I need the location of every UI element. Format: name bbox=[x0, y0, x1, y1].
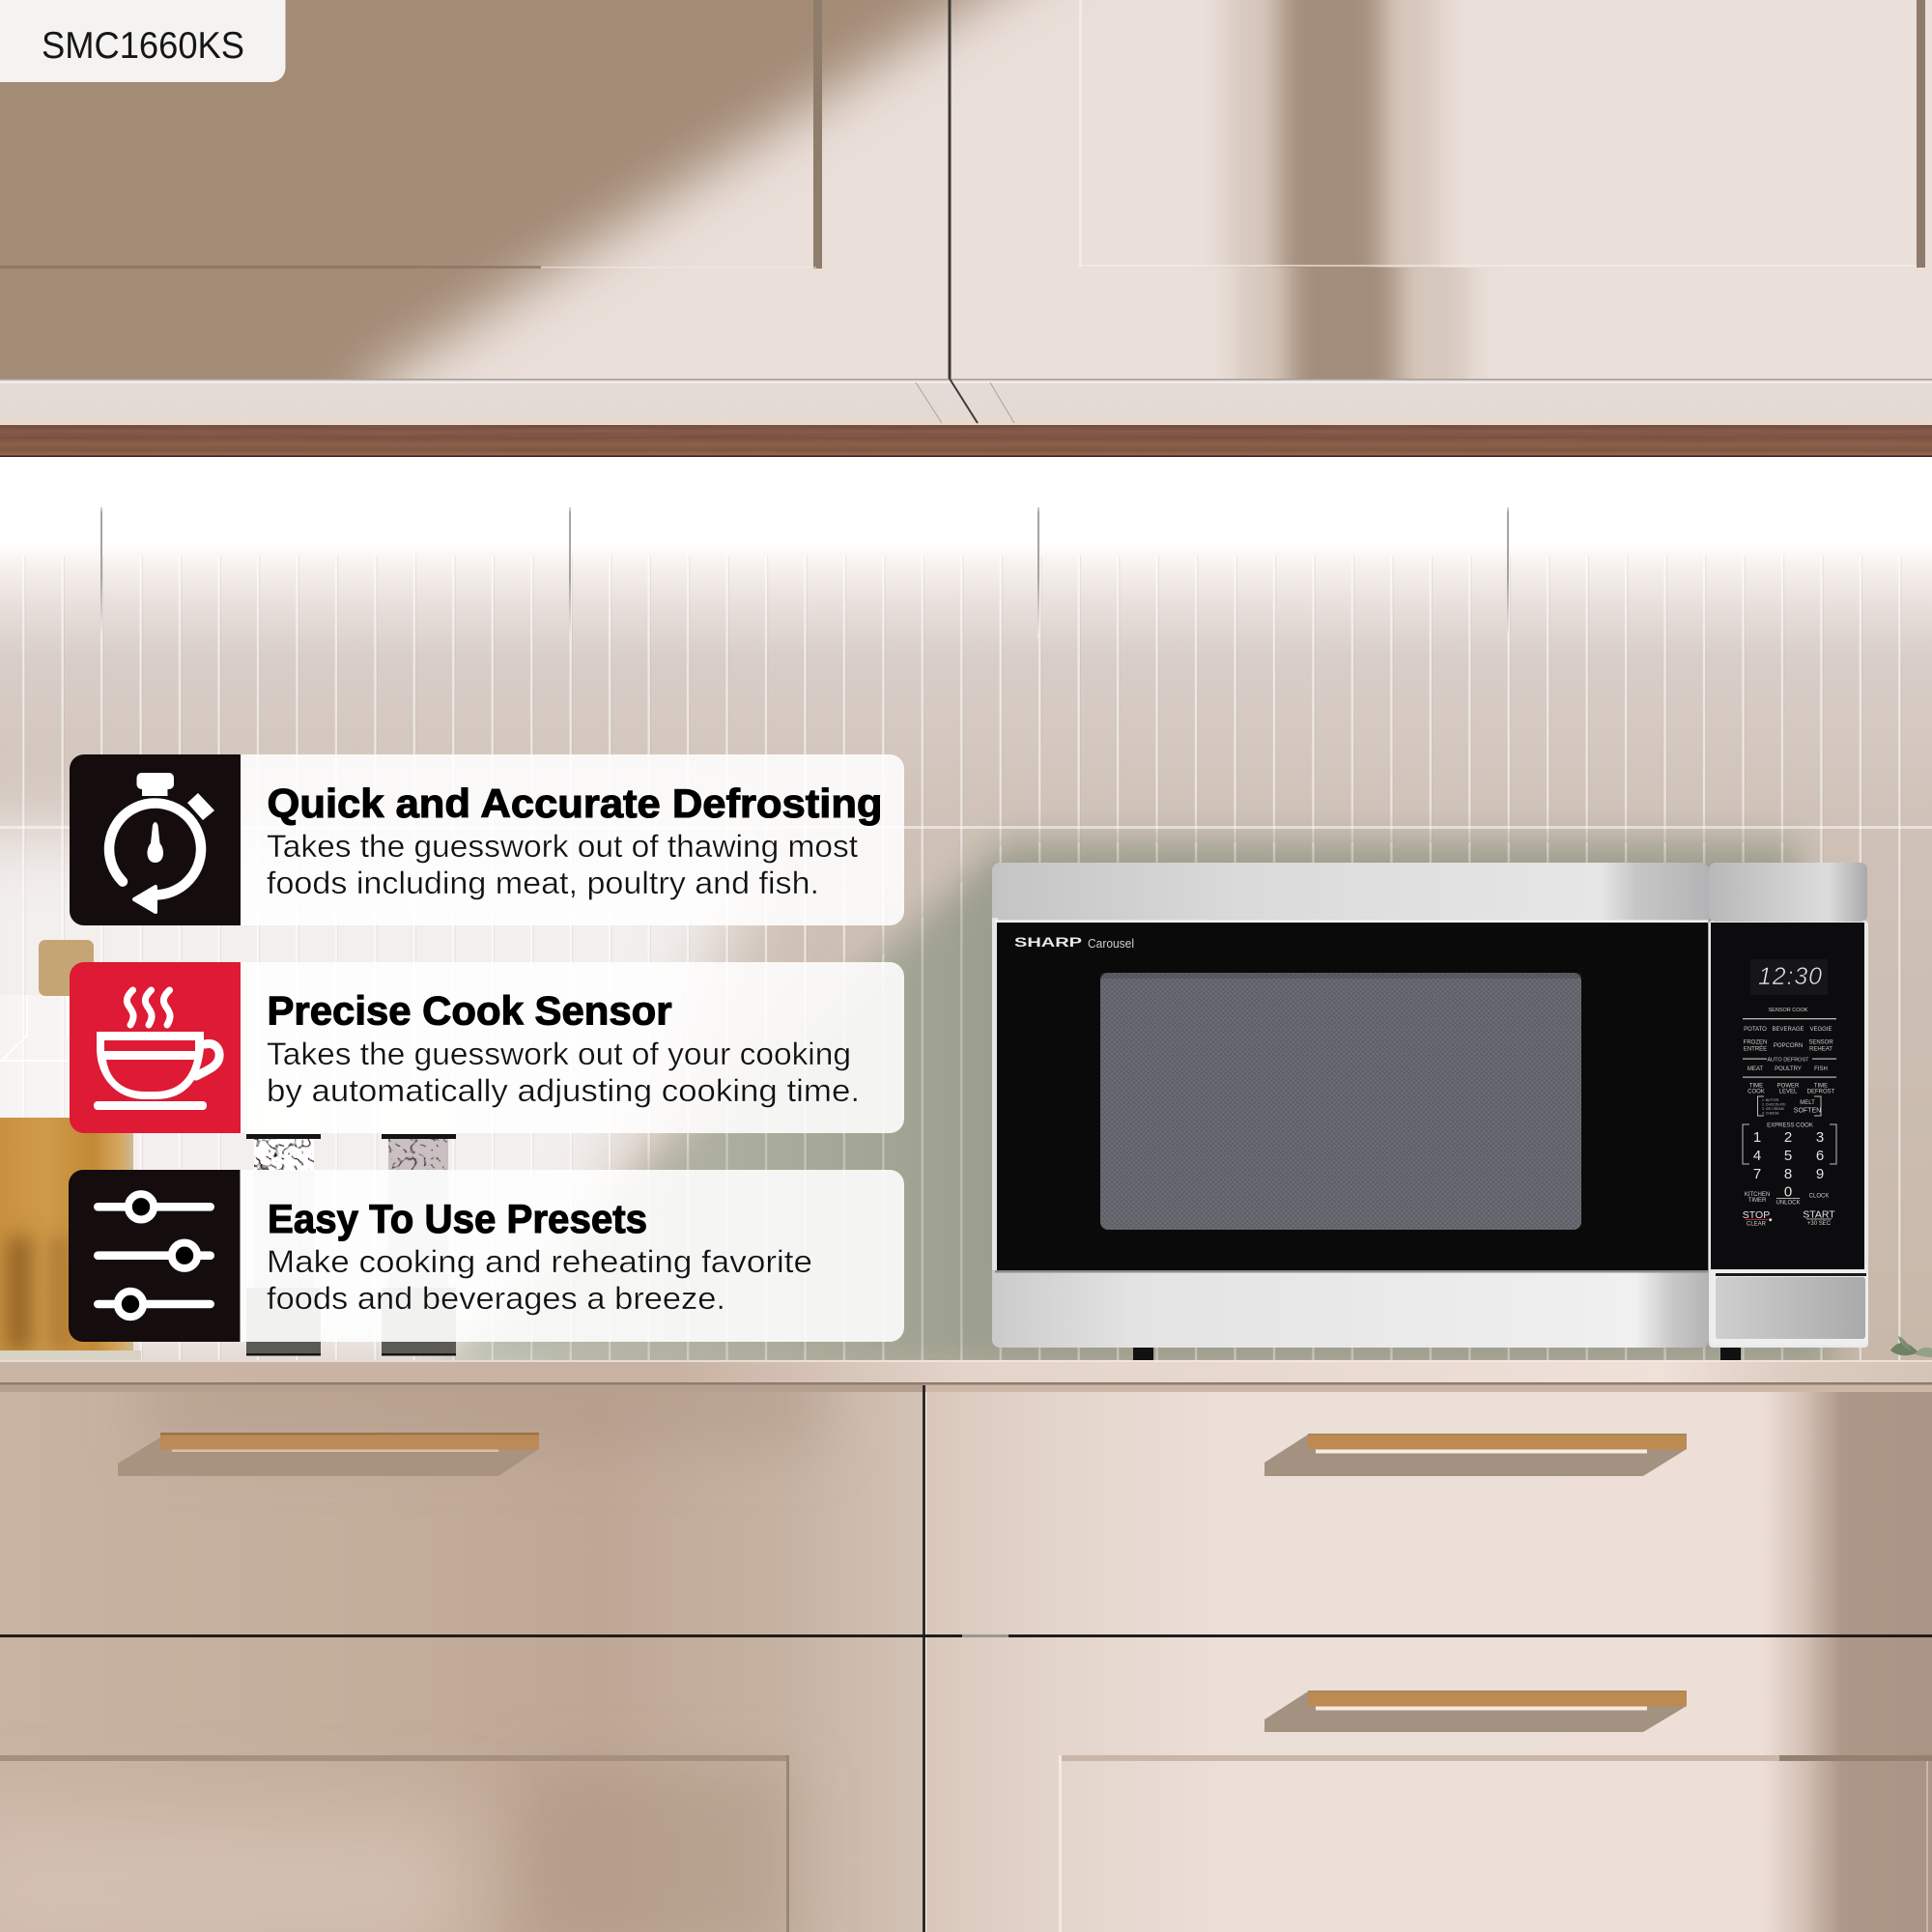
keypad: 1 bbox=[1753, 1129, 1761, 1146]
sensor cook labels: REHEAT bbox=[1809, 1047, 1833, 1053]
panel: quick and accurate defrosting bbox=[70, 754, 904, 925]
display bbox=[1750, 959, 1828, 995]
melt soften bbox=[1758, 1096, 1821, 1116]
left handle shadow bbox=[118, 1437, 539, 1476]
model number tag: SMC1660KS bbox=[42, 25, 244, 67]
microwave bbox=[992, 863, 1868, 1360]
stop start: STOP bbox=[1743, 1209, 1770, 1221]
body text bbox=[267, 1037, 860, 1108]
plant sprig bbox=[1890, 1336, 1932, 1357]
keypad: 3 bbox=[1816, 1129, 1824, 1146]
upper door inner groove right bbox=[1079, 0, 1082, 267]
icon: stopwatch bbox=[109, 773, 214, 912]
body text: foods including meat, poultry and fish. bbox=[267, 866, 819, 900]
melt soften: MELT bbox=[1800, 1100, 1815, 1106]
body text: Takes the guesswork out of thawing most bbox=[267, 829, 858, 864]
time labels: COOK bbox=[1747, 1090, 1765, 1095]
icon tile: defrost bbox=[70, 754, 241, 925]
icon tile: sensor bbox=[70, 962, 241, 1133]
cork bbox=[39, 940, 94, 996]
keypad: 6 bbox=[1816, 1148, 1824, 1164]
stop start: START bbox=[1803, 1209, 1835, 1221]
melt soften: 3. ICE CREAM bbox=[1762, 1107, 1784, 1111]
upper door inner groove left bbox=[813, 0, 822, 269]
keypad: 2 bbox=[1784, 1129, 1792, 1146]
auto defrost labels: AUTO DEFROST bbox=[1768, 1057, 1809, 1063]
auto defrost labels: MEAT bbox=[1747, 1066, 1763, 1072]
wall shadow bbox=[430, 842, 1835, 1372]
time labels: LEVEL bbox=[1779, 1090, 1798, 1095]
keypad bbox=[1743, 1122, 1836, 1206]
time labels: TIME bbox=[1749, 1084, 1763, 1090]
body text bbox=[267, 829, 858, 900]
melt soften: 4. CHEESE bbox=[1762, 1111, 1779, 1115]
time labels: POWER bbox=[1777, 1084, 1800, 1090]
tiled wall bbox=[0, 457, 1932, 1372]
bottle bbox=[0, 940, 141, 1361]
icon tile: presets bbox=[69, 1170, 240, 1342]
display: 12:30 bbox=[1758, 963, 1822, 990]
feet bbox=[1133, 1347, 1741, 1360]
right lower drawers bbox=[926, 1392, 1932, 1932]
keypad: 7 bbox=[1753, 1166, 1761, 1182]
keypad: TIMER bbox=[1748, 1198, 1767, 1204]
brand logo: SHARP bbox=[1014, 935, 1082, 950]
brand logo bbox=[1014, 935, 1134, 951]
left lower drawers bbox=[0, 1352, 923, 1932]
upper door gap bbox=[949, 0, 951, 379]
auto defrost labels bbox=[1743, 1057, 1836, 1078]
sensor cook labels: SENSOR COOK bbox=[1769, 1008, 1808, 1013]
time labels bbox=[1747, 1084, 1835, 1095]
sensor cook labels: POTATO bbox=[1744, 1027, 1767, 1033]
body steel bbox=[992, 863, 1868, 1348]
wood trim strip bbox=[0, 425, 1932, 458]
body text: foods and beverages a breeze. bbox=[267, 1281, 725, 1316]
control panel bbox=[1711, 923, 1864, 1269]
pepper grinder right bbox=[382, 1087, 456, 1356]
cabinet gaps bbox=[0, 1385, 1932, 1932]
icon: sliders bbox=[94, 1194, 214, 1317]
right top handle bbox=[1308, 1434, 1687, 1453]
right lower handle shadow bbox=[1264, 1691, 1687, 1732]
heading: Easy To Use Presets bbox=[268, 1196, 647, 1241]
melt soften: 2. CHOCOLATE bbox=[1762, 1103, 1786, 1107]
sensor cook labels: FROZEN bbox=[1744, 1039, 1767, 1045]
keypad: CLOCK bbox=[1809, 1194, 1829, 1200]
body text: Takes the guesswork out of your cooking bbox=[267, 1037, 851, 1071]
stop start: +30 SEC bbox=[1807, 1221, 1832, 1227]
right top handle shadow bbox=[1264, 1435, 1687, 1476]
door window bbox=[1100, 973, 1581, 1230]
left handle bbox=[160, 1433, 539, 1452]
left panel inset bbox=[0, 1755, 789, 1932]
melt soften: 1. BUTTER bbox=[1762, 1098, 1779, 1102]
door panel bbox=[997, 923, 1708, 1270]
body text bbox=[267, 1244, 812, 1316]
brand logo: Carousel bbox=[1088, 937, 1134, 951]
heading: Quick and Accurate Defrosting bbox=[267, 781, 883, 826]
sensor cook labels: ENTRÉE bbox=[1744, 1045, 1767, 1053]
cabinet rail bbox=[0, 379, 1932, 425]
melt soften: SOFTEN bbox=[1794, 1107, 1821, 1115]
icon: steaming cup bbox=[94, 990, 219, 1110]
keypad: KITCHEN bbox=[1745, 1192, 1770, 1198]
keypad: EXPRESS COOK bbox=[1767, 1122, 1813, 1128]
stop start bbox=[1743, 1209, 1835, 1227]
sensor cook labels: BEVERAGE bbox=[1772, 1027, 1804, 1033]
stop start: CLEAR bbox=[1747, 1221, 1767, 1227]
sensor cook labels: POPCORN bbox=[1774, 1043, 1803, 1049]
keypad: UNLOCK bbox=[1776, 1200, 1801, 1206]
countertop bbox=[0, 1360, 1932, 1392]
time labels: DEFROST bbox=[1807, 1090, 1835, 1095]
upper cabinets bbox=[0, 0, 1932, 425]
sensor cook labels: VEGGIE bbox=[1809, 1027, 1833, 1033]
auto defrost labels: POULTRY bbox=[1775, 1066, 1802, 1072]
body text: by automatically adjusting cooking time. bbox=[267, 1073, 860, 1108]
heading: Precise Cook Sensor bbox=[267, 988, 672, 1034]
panel: easy to use presets bbox=[69, 1170, 904, 1342]
keypad: 9 bbox=[1816, 1166, 1824, 1182]
keypad: 8 bbox=[1784, 1166, 1792, 1182]
panel: precise cook sensor bbox=[70, 962, 904, 1133]
time labels: TIME bbox=[1814, 1084, 1828, 1090]
body text: Make cooking and reheating favorite bbox=[267, 1244, 812, 1279]
pepper grinder left bbox=[246, 1087, 321, 1356]
right lower handle bbox=[1308, 1690, 1687, 1710]
keypad: 5 bbox=[1784, 1148, 1792, 1164]
door release bbox=[1710, 1269, 1868, 1346]
model number tag bbox=[0, 0, 286, 82]
sensor cook labels bbox=[1743, 1008, 1836, 1053]
keypad: 4 bbox=[1753, 1148, 1761, 1164]
sensor cook labels: SENSOR bbox=[1808, 1039, 1833, 1045]
keypad: 0 bbox=[1784, 1184, 1792, 1200]
auto defrost labels: FISH bbox=[1814, 1066, 1828, 1072]
right panel inset bbox=[1059, 1755, 1932, 1932]
